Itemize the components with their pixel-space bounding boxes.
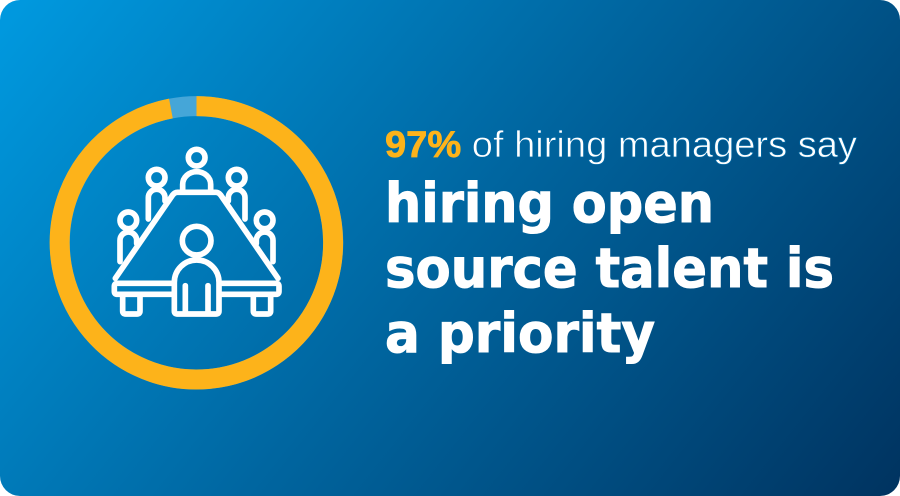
- left front person: [120, 212, 137, 262]
- body of front person: [174, 260, 219, 314]
- table top: [114, 192, 279, 294]
- ring remainder: 3%: [60, 106, 333, 380]
- body of back person: [183, 172, 211, 191]
- bold line 3: a priority: [385, 302, 655, 365]
- table leg left: [123, 296, 140, 314]
- table leg right: [253, 296, 271, 314]
- right rear person: [228, 169, 245, 219]
- head of front person: [182, 226, 211, 255]
- head of back person: [188, 149, 205, 166]
- donut chart: 97%: [60, 106, 333, 379]
- bold line 2: source talent is: [385, 237, 834, 300]
- icon: people around a meeting table: [114, 149, 279, 314]
- headline text: [385, 124, 858, 365]
- intro line: 97% of hiring managers say: [385, 124, 858, 165]
- bold line 1: hiring open: [385, 172, 714, 235]
- right front person: [256, 212, 273, 262]
- ring value: 97%: [60, 106, 333, 379]
- left rear person: [148, 169, 165, 219]
